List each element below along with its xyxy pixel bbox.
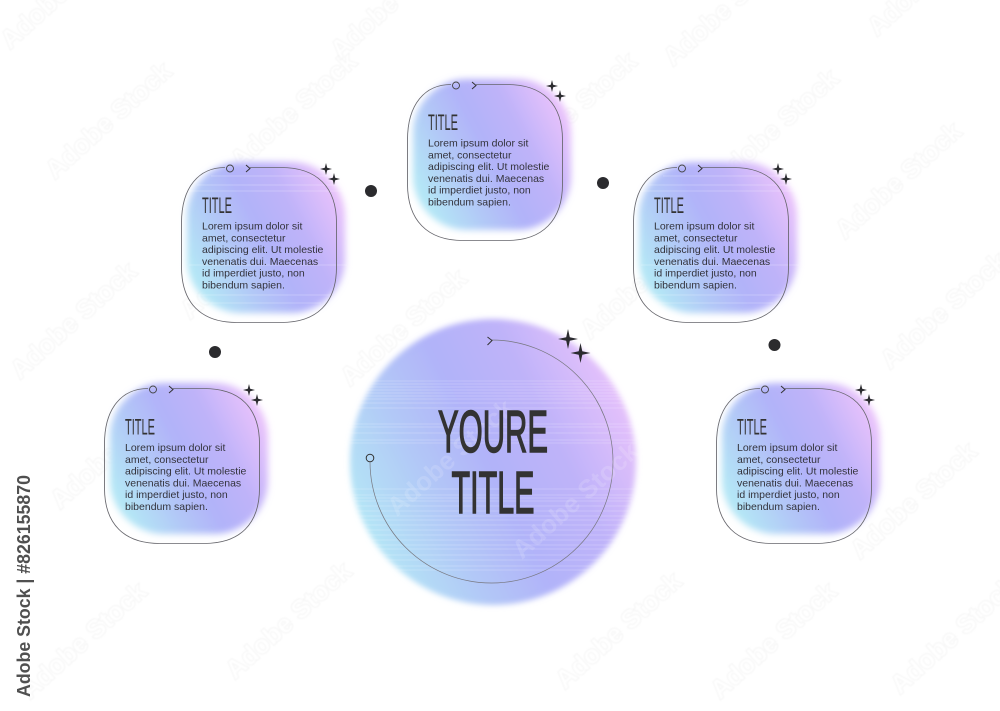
card outline [716, 388, 872, 544]
card body: Lorem ipsum dolor sit [125, 442, 225, 454]
gradient disc [350, 319, 636, 605]
card body: venenatis dui. Maecenas [654, 256, 770, 268]
watermark over circle [381, 392, 645, 564]
main title [438, 399, 548, 526]
watermark pattern: Adobe Stock [39, 55, 178, 184]
card body: venenatis dui. Maecenas [428, 173, 544, 185]
watermark over circle: Adobe Stock [506, 435, 645, 564]
card body: bibendum sapien. [125, 501, 208, 513]
card body [737, 442, 859, 513]
card title: TITLE [125, 414, 155, 440]
card title: TITLE [654, 193, 684, 218]
card body [125, 442, 247, 513]
watermark pattern: Adobe Stock [706, 62, 845, 191]
watermark pattern: Adobe Stock [549, 565, 688, 694]
card background [110, 383, 268, 534]
card body: adipiscing elit. Ut molestie [737, 466, 859, 478]
card arrow [169, 386, 173, 393]
main title: YOURE [438, 399, 548, 465]
card body: amet, consectetur [654, 232, 738, 244]
card background [639, 162, 797, 313]
card body [202, 220, 324, 292]
card body: id imperdiet justo, non [654, 268, 757, 280]
card body: id imperdiet justo, non [202, 268, 305, 280]
scan lines [349, 381, 637, 570]
card node [678, 165, 686, 172]
scan lines [189, 176, 347, 303]
card body: id imperdiet justo, non [125, 489, 228, 501]
card: upper right [634, 162, 799, 322]
card body: Lorem ipsum dolor sit [654, 220, 754, 232]
watermark pattern: Adobe Stock [704, 575, 843, 704]
orbit node [366, 454, 374, 462]
card body: venenatis dui. Maecenas [125, 477, 241, 489]
card arrow [246, 165, 250, 172]
sparkles [243, 384, 263, 406]
card body: Lorem ipsum dolor sit [737, 442, 837, 454]
card title: TITLE [737, 414, 767, 440]
card: top center [408, 79, 571, 240]
main circle: your title [349, 319, 645, 605]
card node [762, 386, 768, 393]
card outline [408, 84, 562, 240]
watermark pattern: Adobe Stock [44, 385, 183, 514]
card body: bibendum sapien. [202, 280, 285, 292]
watermark pattern: Adobe Stock [504, 45, 643, 174]
card body: Lorem ipsum dolor sit [428, 138, 528, 150]
watermark pattern: Adobe Stock [829, 115, 968, 244]
connector dots [209, 177, 780, 358]
card background [413, 79, 571, 230]
card body: venenatis dui. Maecenas [737, 477, 853, 489]
sparkles [546, 80, 566, 102]
card body: adipiscing elit. Ut molestie [654, 244, 776, 256]
card body: amet, consectetur [125, 454, 209, 466]
main title: TITLE [452, 460, 534, 526]
card title: TITLE [428, 110, 458, 135]
card arrow [698, 165, 702, 172]
card node [150, 386, 156, 393]
card arrow [781, 386, 785, 393]
sparkles [772, 163, 792, 185]
card body: venenatis dui. Maecenas [202, 256, 318, 268]
card body: bibendum sapien. [654, 280, 737, 292]
card background [722, 383, 880, 534]
card: upper left [182, 162, 347, 322]
card outline [634, 168, 788, 322]
card node [452, 82, 460, 89]
stock id vertical text: Adobe Stock | #826155870 [14, 475, 34, 697]
card body: amet, consectetur [202, 232, 286, 244]
card title: TITLE [202, 193, 232, 218]
watermark pattern: Adobe Stock [14, 575, 153, 704]
watermark pattern: Adobe Stock [219, 555, 358, 684]
card body: id imperdiet justo, non [428, 185, 531, 197]
sparkles [855, 384, 875, 406]
card node [226, 165, 234, 172]
watermark pattern: Adobe Stock [574, 215, 713, 344]
watermark pattern: Adobe Stock [224, 45, 363, 174]
card body: adipiscing elit. Ut molestie [125, 466, 247, 478]
card body: adipiscing elit. Ut molestie [202, 244, 324, 256]
card arrow [472, 82, 476, 89]
card: bottom left [104, 383, 268, 544]
watermark over circle: Adobe Stock [381, 392, 520, 521]
watermark pattern: Adobe Stock [844, 435, 983, 564]
card body [654, 220, 776, 292]
orbit arc [370, 340, 613, 583]
card body: amet, consectetur [737, 454, 821, 466]
card body: amet, consectetur [428, 149, 512, 161]
card body: id imperdiet justo, non [737, 489, 840, 501]
card body [428, 138, 550, 208]
orbit arrow [488, 337, 492, 345]
card: bottom right [716, 383, 880, 544]
card background [187, 162, 345, 313]
watermark pattern: Adobe Stock [174, 195, 313, 324]
card body: Lorem ipsum dolor sit [202, 220, 302, 232]
sparkles [558, 329, 590, 363]
watermark pattern: Adobe Stock [334, 262, 473, 391]
card body: bibendum sapien. [737, 501, 820, 513]
card body: bibendum sapien. [428, 196, 511, 208]
card outline [104, 388, 260, 544]
watermark pattern: Adobe Stock [4, 255, 143, 384]
card outline [182, 168, 336, 322]
card body: adipiscing elit. Ut molestie [428, 161, 550, 173]
sparkles [320, 163, 340, 185]
scan lines [641, 176, 799, 303]
